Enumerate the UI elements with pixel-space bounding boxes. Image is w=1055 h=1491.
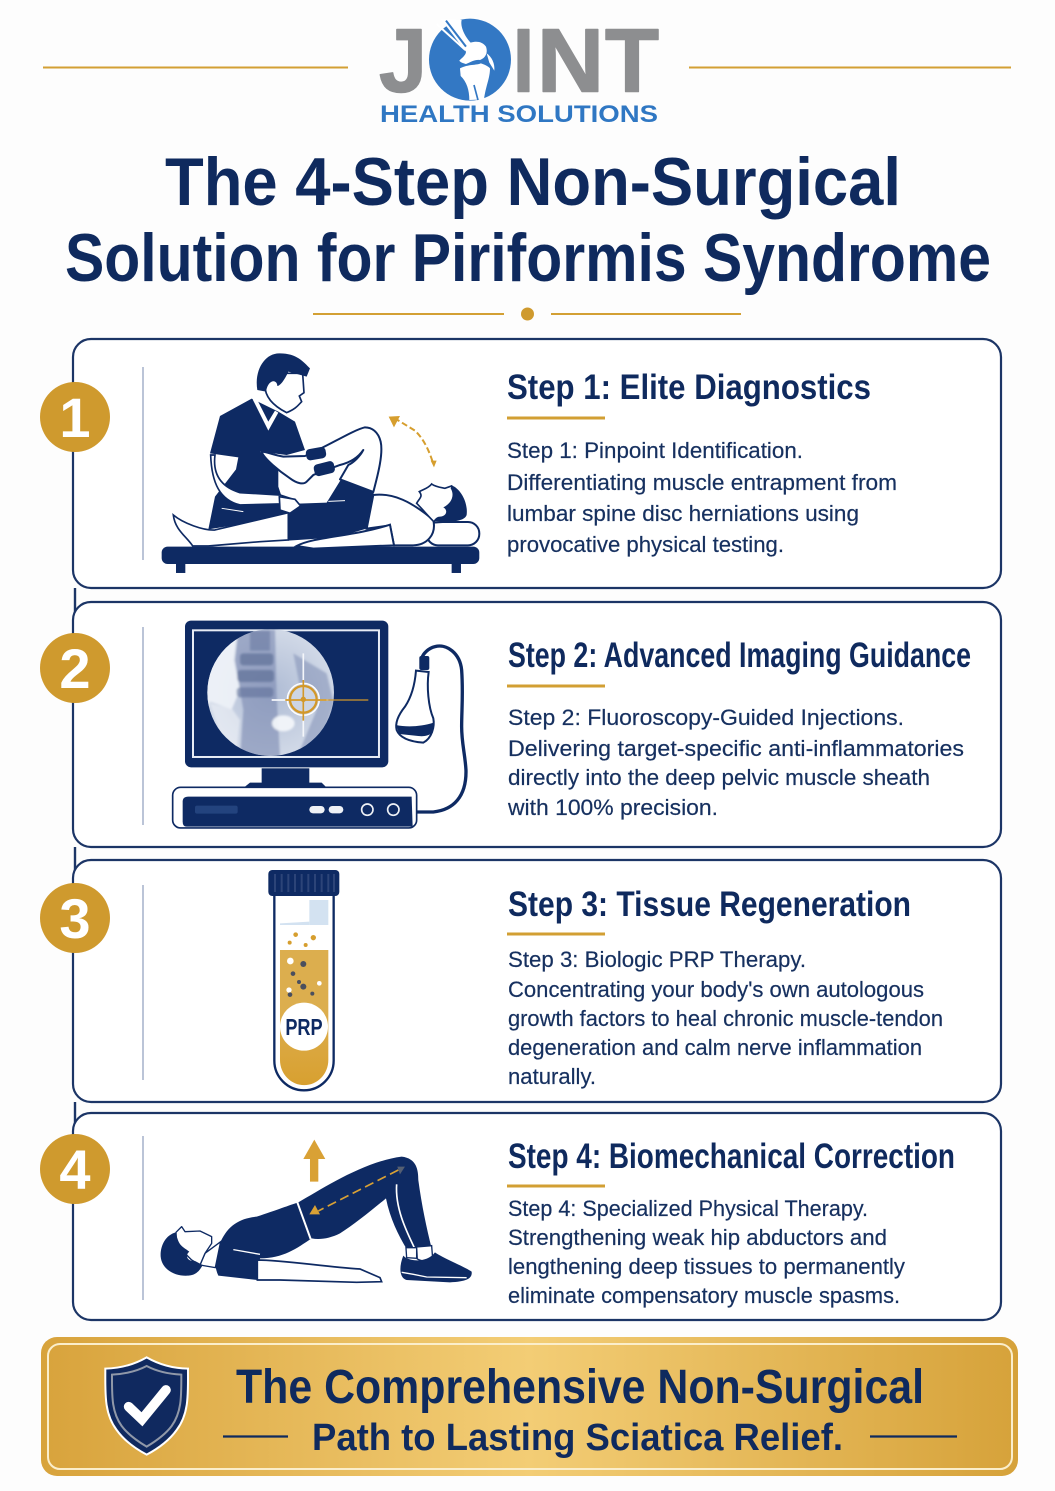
number badge 2: 2 [59,637,91,700]
banner text: Path to Lasting Sciatica Relief. [312,1417,843,1459]
number badge 1: 1 [59,386,91,449]
illustration: therapist testing patient's hip [162,353,479,573]
logo: N [537,12,604,112]
step 1 body: Step 1: Pinpoint Identification. [507,438,803,463]
number badge 4 [40,1134,110,1204]
step 3 body: naturally. [508,1064,596,1089]
illustration: PRP test tube: PRP [285,1014,323,1040]
step 3 body: Concentrating your body's own autologous [508,977,924,1002]
step 1 body: Differentiating muscle entrapment from [507,470,897,495]
number badge 3: 3 [59,887,91,950]
number badge 1 [40,382,110,452]
illustration: PRP test tube [268,870,339,1090]
step 4 body: Strengthening weak hip abductors and [508,1225,887,1250]
logo [43,12,1011,128]
icon: knee joint in blue circle [429,19,511,101]
step 1 body: lumbar spine disc herniations using [507,501,859,526]
step 3 body: growth factors to heal chronic muscle-tendon [508,1006,943,1031]
panel: step 4 [40,1113,1001,1320]
step 3 heading: Step 3: Tissue Regeneration [508,885,911,924]
step 1 body: provocative physical testing. [507,532,784,557]
illustration: glute bridge exercise [161,1140,472,1282]
number badge 2 [40,633,110,703]
panel: step 1 [40,339,1001,588]
step 4 body: Step 4: Specialized Physical Therapy. [508,1196,868,1221]
step 4 body [508,1196,906,1308]
number badge 4: 4 [59,1138,91,1201]
panel: step 2 [40,602,1001,847]
logo: T [605,12,659,112]
number badge 3 [40,883,110,953]
panel: step 3 [40,860,1001,1102]
step 1 body [507,438,897,557]
step 2 body [507,705,964,820]
title divider [313,308,741,320]
step 2 body: with 100% precision. [507,795,718,820]
logo: J [379,12,427,112]
step 4 body: lengthening deep tissues to permanently [508,1254,906,1279]
icon: shield with check [105,1357,188,1455]
title: The 4-Step Non-Surgical [165,144,901,220]
illustration: fluoroscopy monitor and probe [173,621,466,828]
step 2 body: Step 2: Fluoroscopy-Guided Injections. [508,705,904,730]
step 4 heading: Step 4: Biomechanical Correction [508,1137,955,1176]
step 3 body [508,947,943,1089]
logo: HEALTH SOLUTIONS [380,101,658,128]
step 3 body: Step 3: Biologic PRP Therapy. [508,947,806,972]
title [65,144,991,296]
step 2 body: Delivering target-specific anti-inflammatories [508,736,964,761]
logo: I [513,12,534,112]
banner text [223,1361,957,1459]
callout banner [41,1337,1018,1476]
connector lines between steps [74,588,76,1126]
banner text: The Comprehensive Non-Surgical [236,1361,924,1414]
step 3 body: degeneration and calm nerve inflammation [508,1035,922,1060]
step 4 body: eliminate compensatory muscle spasms. [508,1283,900,1308]
step 1 heading: Step 1: Elite Diagnostics [507,368,871,407]
step 2 body: directly into the deep pelvic muscle sheath [508,765,930,790]
